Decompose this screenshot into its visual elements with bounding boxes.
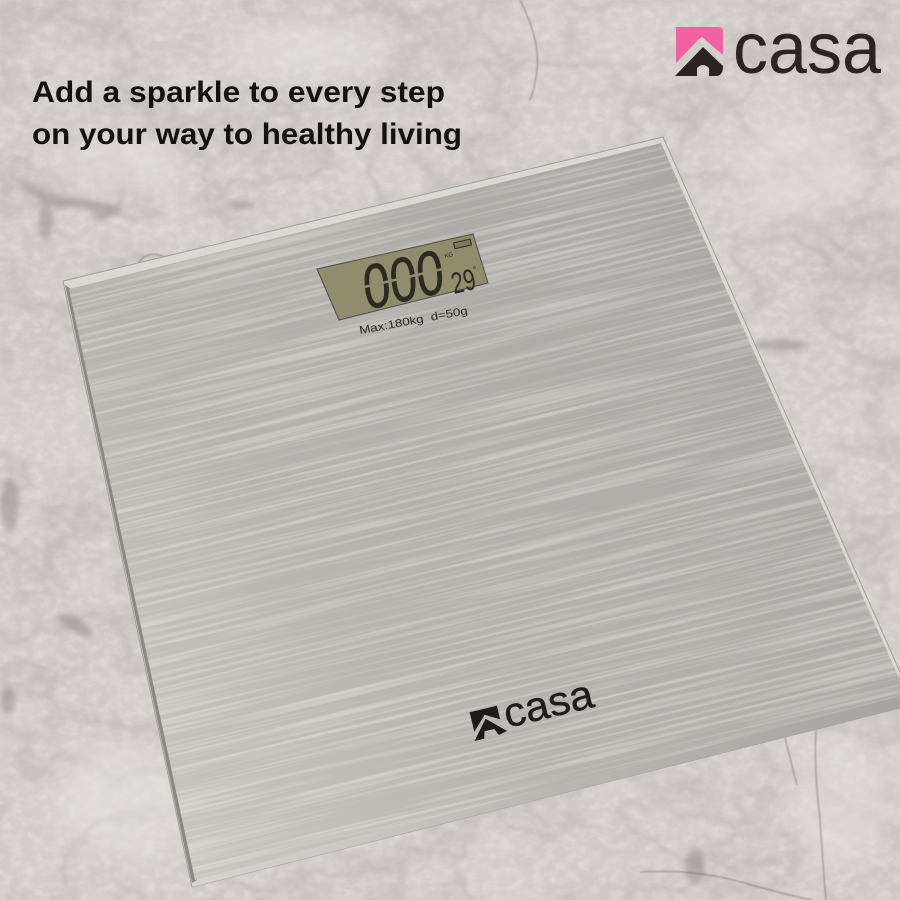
bathroom scale <box>63 137 900 887</box>
headline: on your way to healthy living <box>32 118 462 151</box>
scale logo icon <box>468 705 508 741</box>
logo icon: pink square with house <box>675 27 723 76</box>
capacity label: Max:180kg d=50g <box>358 305 469 337</box>
LCD temperature: 29 <box>448 263 479 301</box>
glass edge <box>63 137 900 887</box>
LCD temperature: ° <box>472 264 478 275</box>
casa logo <box>675 9 882 89</box>
headline <box>32 76 462 151</box>
headline: Add a sparkle to every step <box>32 76 445 109</box>
dark left bevel <box>65 285 197 883</box>
bottom bevel <box>192 696 900 887</box>
logo wordmark: casa <box>733 9 882 89</box>
brushed stripes <box>69 143 900 880</box>
scale logo wordmark: casa <box>499 670 598 737</box>
LCD digits: 000 <box>359 237 448 324</box>
LCD display <box>317 234 488 325</box>
LCD unit: KG <box>444 252 454 260</box>
LCD battery icon <box>454 239 471 249</box>
scale logo <box>465 670 598 745</box>
scale face <box>69 143 900 880</box>
